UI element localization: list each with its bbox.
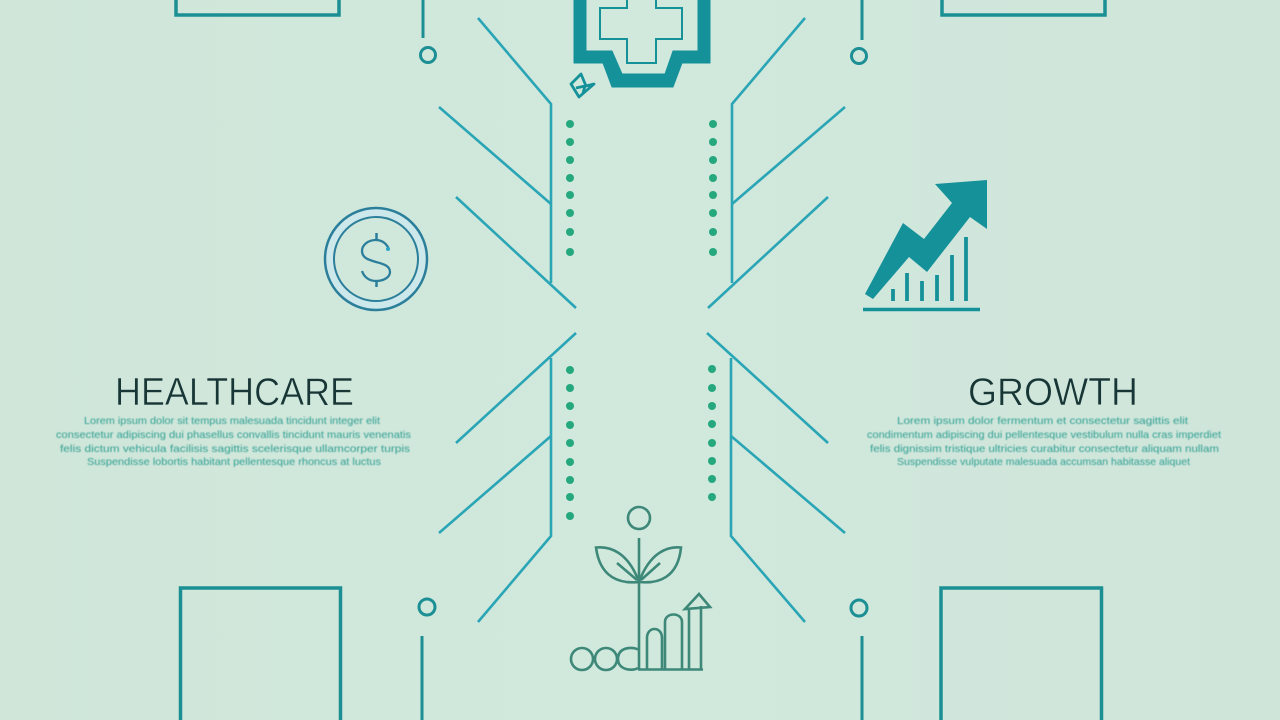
panel frame: top left [176,0,339,15]
text block: growth description: condimentum adipiscing dui pellentesque vestibulum nulla cras imperdiet [867,429,1221,441]
icon: small leaf mark [571,74,594,97]
connector node: bottom left [419,599,435,720]
panel frame: bottom left [180,588,340,720]
text block: healthcare description: felis dictum vehicula facilisis sagittis scelerisque ullamcorper turpis [60,443,410,455]
text block: growth description: Suspendisse vulputate malesuada accumsan habitasse aliquet [897,456,1190,468]
icon: plant with bars [571,507,710,670]
dotted column: upper left [566,120,574,256]
panel frame: bottom right [941,588,1102,720]
text block: growth description: Lorem ipsum dolor fermentum et consectetur sagittis elit [897,415,1188,427]
circuit lines: upper right [708,18,845,308]
dotted column: lower right [708,365,716,501]
icon: medical cross shield [574,0,710,87]
text block: healthcare description: consectetur adipiscing dui phasellus convallis tincidunt mauris venenatis [56,429,411,441]
connector node: bottom right [851,600,867,720]
text block: healthcare description: Suspendisse lobortis habitant pellentesque rhoncus at luctus [87,456,381,468]
dotted column: lower left [566,366,574,520]
connector node: top left [420,0,436,62]
circuit lines: upper left [439,18,576,308]
icon: dollar coin [325,208,427,310]
text block: growth description: felis dignissim tristique ultricies curabitur consectetur aliquam nullam [870,443,1219,455]
heading: healthcare: HEALTHCARE [115,371,354,414]
dotted column: upper right [709,120,717,256]
text block: healthcare description: Lorem ipsum dolor sit tempus malesuada tincidunt integer elit [84,415,380,427]
heading: growth: GROWTH [968,371,1138,414]
circuit lines: lower left [439,333,576,622]
text block: growth description [867,415,1221,468]
text block: healthcare description [56,415,411,468]
panel frame: top right [942,0,1105,15]
circuit lines: lower right [707,333,845,622]
icon: growth arrow chart [863,180,987,310]
connector node: top right [852,0,866,64]
